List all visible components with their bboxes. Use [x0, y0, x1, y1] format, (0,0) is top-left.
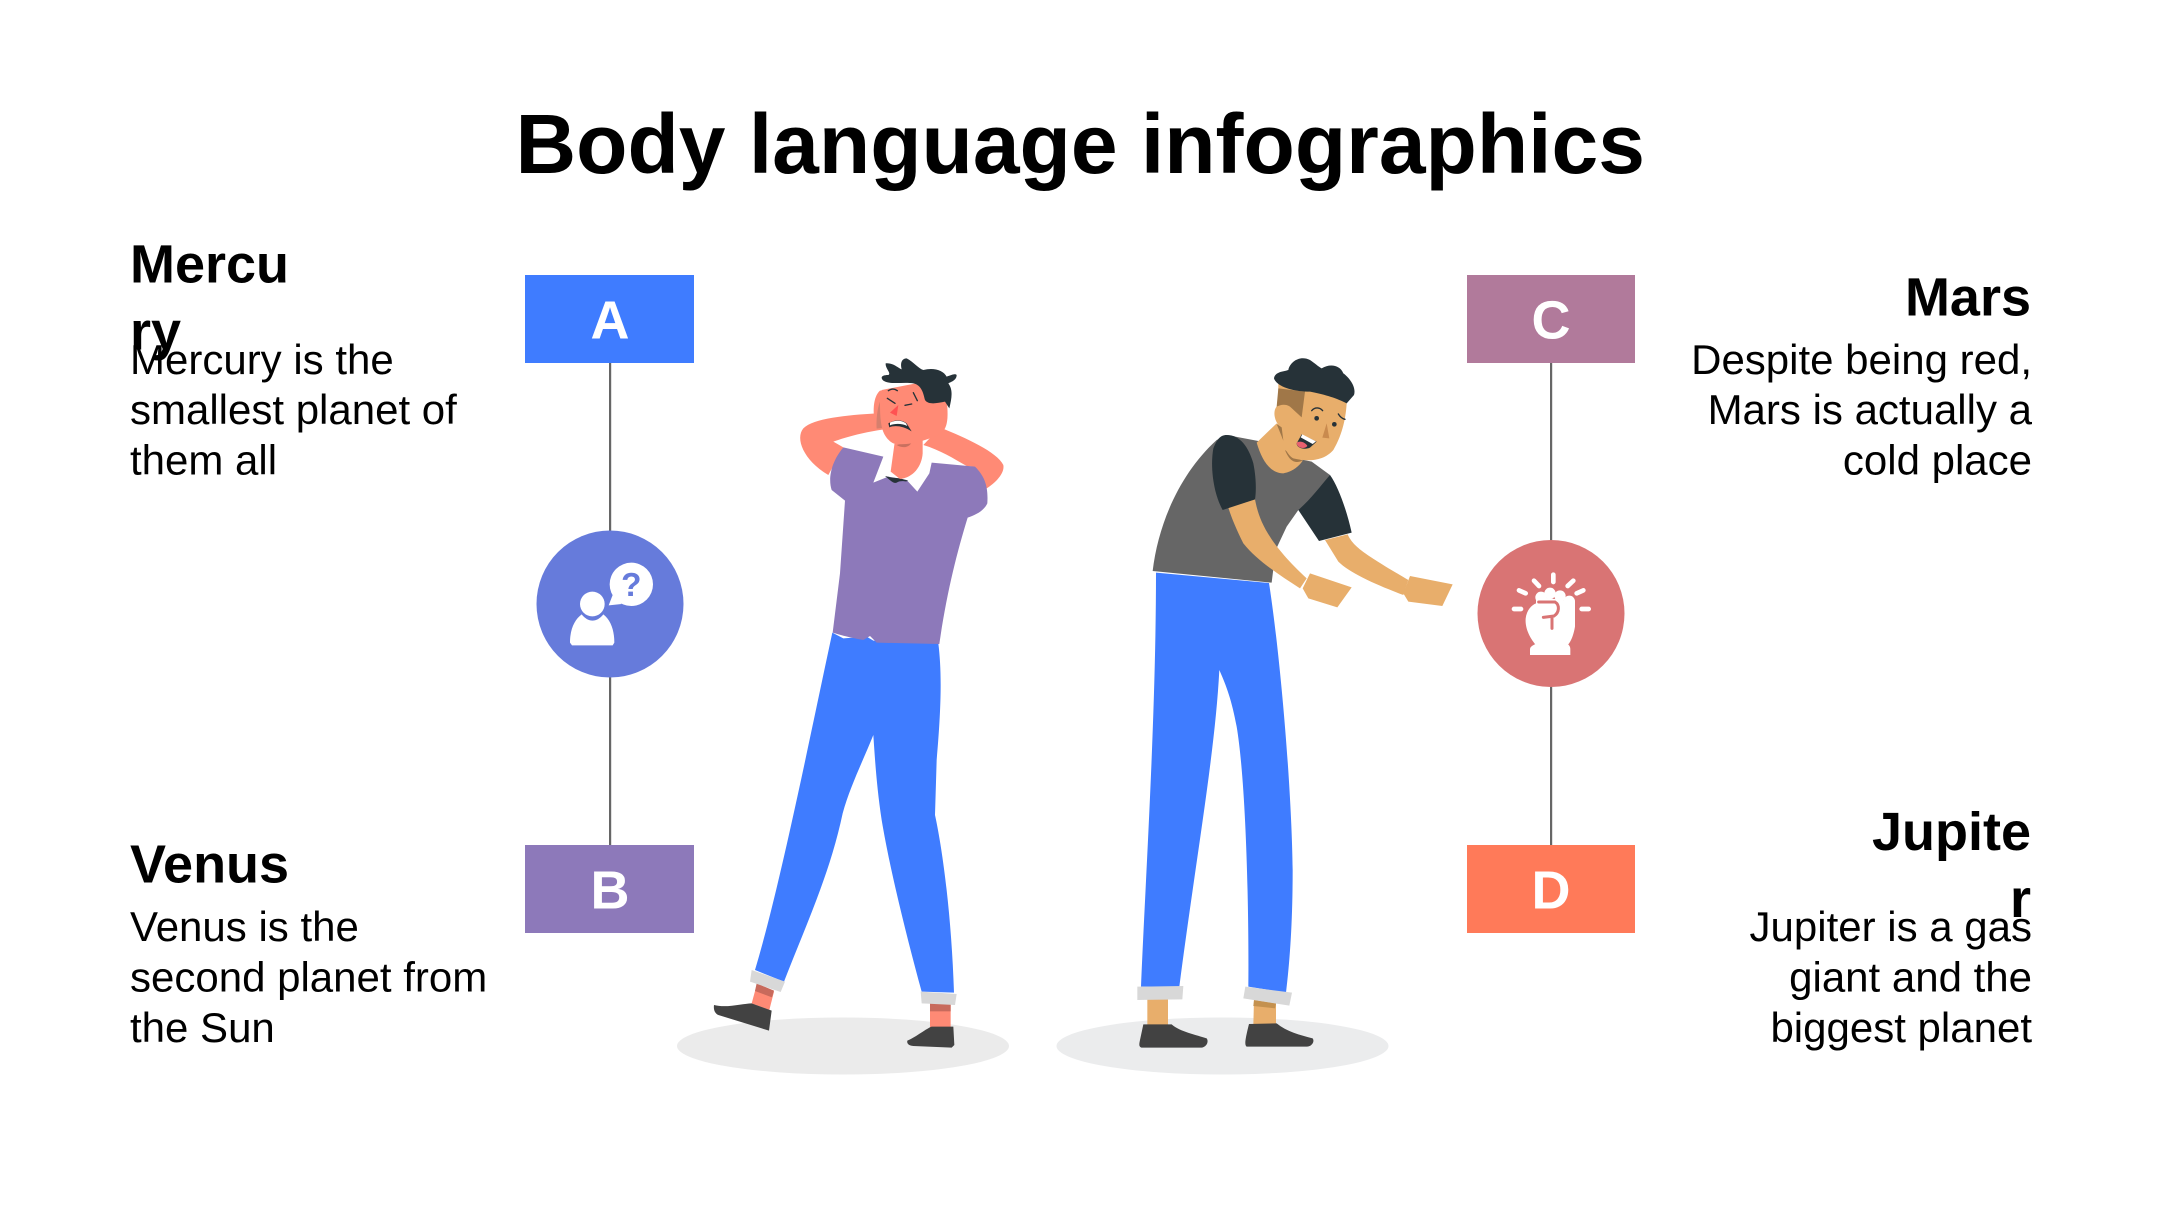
box D: D [1532, 860, 1570, 920]
heading: Mercury: ry [130, 302, 181, 362]
box C: C [1532, 290, 1570, 350]
box C [1467, 275, 1635, 363]
heading: Jupiter: r [2010, 869, 2031, 929]
description: Venus: Venus is the [130, 903, 359, 950]
connector: C to D [1550, 363, 1552, 845]
legs and shoes [1137, 573, 1313, 1048]
icon: fist with rays [1478, 540, 1624, 687]
box A [525, 275, 694, 363]
floor shadow: left figure [677, 1018, 1009, 1074]
box B: B [590, 860, 630, 920]
text block: Venus [130, 835, 487, 1051]
description: Jupiter: giant and the [1789, 954, 2032, 1000]
description: Venus: second planet from [130, 954, 487, 1000]
icon: person with question bubble [536, 530, 684, 678]
text block: Jupiter [1750, 802, 2032, 1051]
box A: A [590, 290, 630, 350]
heading: Jupiter: Jupite [1872, 802, 2031, 862]
icon: person with question bubble: ? [621, 567, 642, 604]
title: Body language infographics [516, 97, 1645, 191]
torso, arms and head [800, 358, 1004, 644]
torso, arms and head [1153, 358, 1453, 607]
description: Mercury: Mercury is the [130, 336, 394, 383]
description: Mars: cold place [1843, 436, 2032, 484]
box B [525, 845, 694, 933]
description: Jupiter: biggest planet [1770, 1004, 2032, 1051]
figure: worried man leaning forward [1137, 358, 1453, 1048]
description: Mars: Mars is actually a [1708, 386, 2033, 433]
floor shadow: right figure [1056, 1018, 1388, 1074]
description: Mercury: smallest planet of [130, 386, 457, 433]
heading: Venus: Venus [130, 835, 289, 895]
text block: Mercury [130, 235, 457, 484]
description: Venus: the Sun [130, 1004, 275, 1051]
heading: Mercury: Mercu [130, 235, 289, 295]
connector: A to B [609, 363, 611, 845]
heading: Mars: Mars [1905, 268, 2031, 328]
description: Jupiter: Jupiter is a gas [1750, 903, 2032, 950]
figure: stressed man holding his head [714, 358, 1004, 1048]
box D [1467, 845, 1635, 933]
description: Mercury: them all [130, 436, 277, 484]
description: Mars: Despite being red, [1691, 336, 2032, 383]
legs and shoes [714, 633, 957, 1048]
text block: Mars [1691, 268, 2033, 484]
